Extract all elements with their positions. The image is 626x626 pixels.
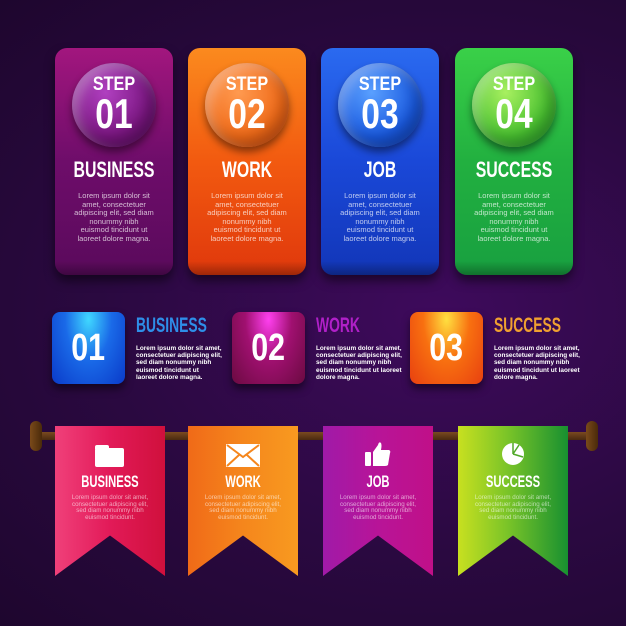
text: success (middle): consectetuer adipiscing elit, [494,352,580,359]
text: work ribbon: Lorem ipsum dolor sit amet, [205,494,281,501]
heading: success: SUCCESS [476,157,552,182]
text: business ribbon: Lorem ipsum dolor sit amet, [72,494,148,501]
text: job ribbon: sed diam nonummy nibh [344,507,412,514]
text: business: adipiscing elit, sed diam [74,208,154,217]
text: work: nonummy nibh [222,216,272,226]
step 04 circle: 04 [495,90,533,137]
text: job ribbon: euismod tincidunt. [353,514,403,521]
heading: job ribbon: JOB [366,472,390,491]
text: business ribbon: sed diam nonummy nibh [76,507,144,514]
heading: business: BUSINESS [74,157,154,182]
text: job ribbon: Lorem ipsum dolor sit amet, [340,494,416,501]
text: job: nonummy nibh [355,216,405,226]
square 02: 02 [252,327,285,369]
text: success [474,191,554,242]
text: success ribbon: euismod tincidunt. [488,514,538,521]
heading: work: WORK [222,157,272,182]
panel: step 01 card [55,48,173,275]
text: work: amet, consectetuer [215,200,279,208]
step 02 circle: STEP [226,74,268,95]
icon: envelope [226,444,260,467]
step 03 circle: STEP [359,74,401,95]
heading: work (middle): WORK [316,314,360,337]
text: business ribbon: consectetuer adipiscing elit, [72,501,148,508]
text: business: laoreet dolore magna. [78,234,150,242]
text: work ribbon: sed diam nonummy nibh [209,507,277,514]
text: work (middle): sed diam nonummy nibh [316,359,391,366]
text: job [340,191,420,242]
text: business: Lorem ipsum dolor sit [78,191,150,200]
text: success ribbon: consectetuer adipiscing elit, [475,501,551,508]
text: job ribbon [340,494,416,519]
step 02 circle: 02 [228,90,266,137]
text: business (middle): Lorem ipsum dolor sit amet, [136,345,222,352]
square 01: 01 [72,327,105,369]
text: job: euismod tincidunt ut [347,225,413,234]
text: success (middle): dolore magna. [494,374,538,381]
step 04 circle [472,63,556,147]
text: job ribbon: consectetuer adipiscing elit, [340,501,416,508]
text: success ribbon: Lorem ipsum dolor sit amet, [475,494,551,501]
square 02 [232,312,305,384]
text: success (middle) [494,345,580,381]
ribbon: success [458,426,568,576]
text: success: nonummy nibh [489,216,539,226]
heading: work ribbon: WORK [225,472,261,491]
step 01 circle: STEP [93,74,135,95]
step 01 circle: 01 [95,90,133,137]
icon: pie chart [502,443,524,465]
text: work (middle): consectetuer adipiscing elit, [316,352,402,359]
text: work ribbon: euismod tincidunt. [218,514,268,521]
text: business (middle): euismod tincidunt ut [136,367,199,374]
text: job: Lorem ipsum dolor sit [344,191,416,200]
panel: step 02 card [188,48,306,275]
text: business: nonummy nibh [89,216,139,226]
text: work: euismod tincidunt ut [214,225,280,234]
text: work: laoreet dolore magna. [211,234,283,242]
text: success (middle): Lorem ipsum dolor sit amet, [494,345,580,352]
text: business: amet, consectetuer [82,200,146,208]
text: success: Lorem ipsum dolor sit [478,191,550,200]
heading: job: JOB [364,157,396,182]
square 01 [52,312,125,384]
text: job: adipiscing elit, sed diam [340,208,420,217]
ribbon: job [323,426,433,576]
heading: business ribbon: BUSINESS [81,472,139,491]
rod right knob [586,421,598,451]
panel: step 03 card [321,48,439,275]
heading: business (middle): BUSINESS [136,314,207,337]
text: work [207,191,287,242]
text: success (middle): sed diam nonummy nibh [494,359,569,366]
step 02 circle [205,63,289,147]
text: success (middle): euismod tincidunt ut laoreet [494,367,580,374]
ribbon: business [55,426,165,576]
text: work ribbon [205,494,281,519]
panel: step 04 card [455,48,573,275]
text: business (middle): sed diam nonummy nibh [136,359,211,366]
heading: success (middle): SUCCESS [494,314,561,337]
text: business (middle) [136,345,222,381]
text: job: laoreet dolore magna. [344,234,416,242]
text: business ribbon [72,494,148,519]
text: business (middle): consectetuer adipiscing elit, [136,352,222,359]
text: business ribbon: euismod tincidunt. [85,514,135,521]
step 01 circle [72,63,156,147]
step 03 circle: 03 [361,90,399,137]
text: business [74,191,154,242]
rod [34,432,594,440]
text: work: Lorem ipsum dolor sit [211,191,283,200]
text: work ribbon: consectetuer adipiscing elit, [205,501,281,508]
text: work (middle): euismod tincidunt ut laoreet [316,367,402,374]
icon: thumbs up [365,442,390,466]
text: success: euismod tincidunt ut [481,225,547,234]
text: work (middle): dolore magna. [316,374,360,381]
text: success: laoreet dolore magna. [478,234,550,242]
rod left knob [30,421,42,451]
square 03: 03 [430,327,463,369]
heading: success ribbon: SUCCESS [486,472,540,491]
text: business: euismod tincidunt ut [81,225,147,234]
step 03 circle [338,63,422,147]
text: work (middle): Lorem ipsum dolor sit amet, [316,345,402,352]
text: work (middle) [316,345,402,381]
text: job: amet, consectetuer [348,200,412,208]
text: success ribbon: sed diam nonummy nibh [479,507,547,514]
icon: folder [95,448,124,467]
square 03 [410,312,483,384]
text: success ribbon [475,494,551,519]
step 04 circle: STEP [493,74,535,95]
text: success: amet, consectetuer [482,200,546,208]
text: work: adipiscing elit, sed diam [207,208,287,217]
ribbon: work [188,426,298,576]
text: success: adipiscing elit, sed diam [474,208,554,217]
text: business (middle): laoreet dolore magna. [136,374,202,381]
